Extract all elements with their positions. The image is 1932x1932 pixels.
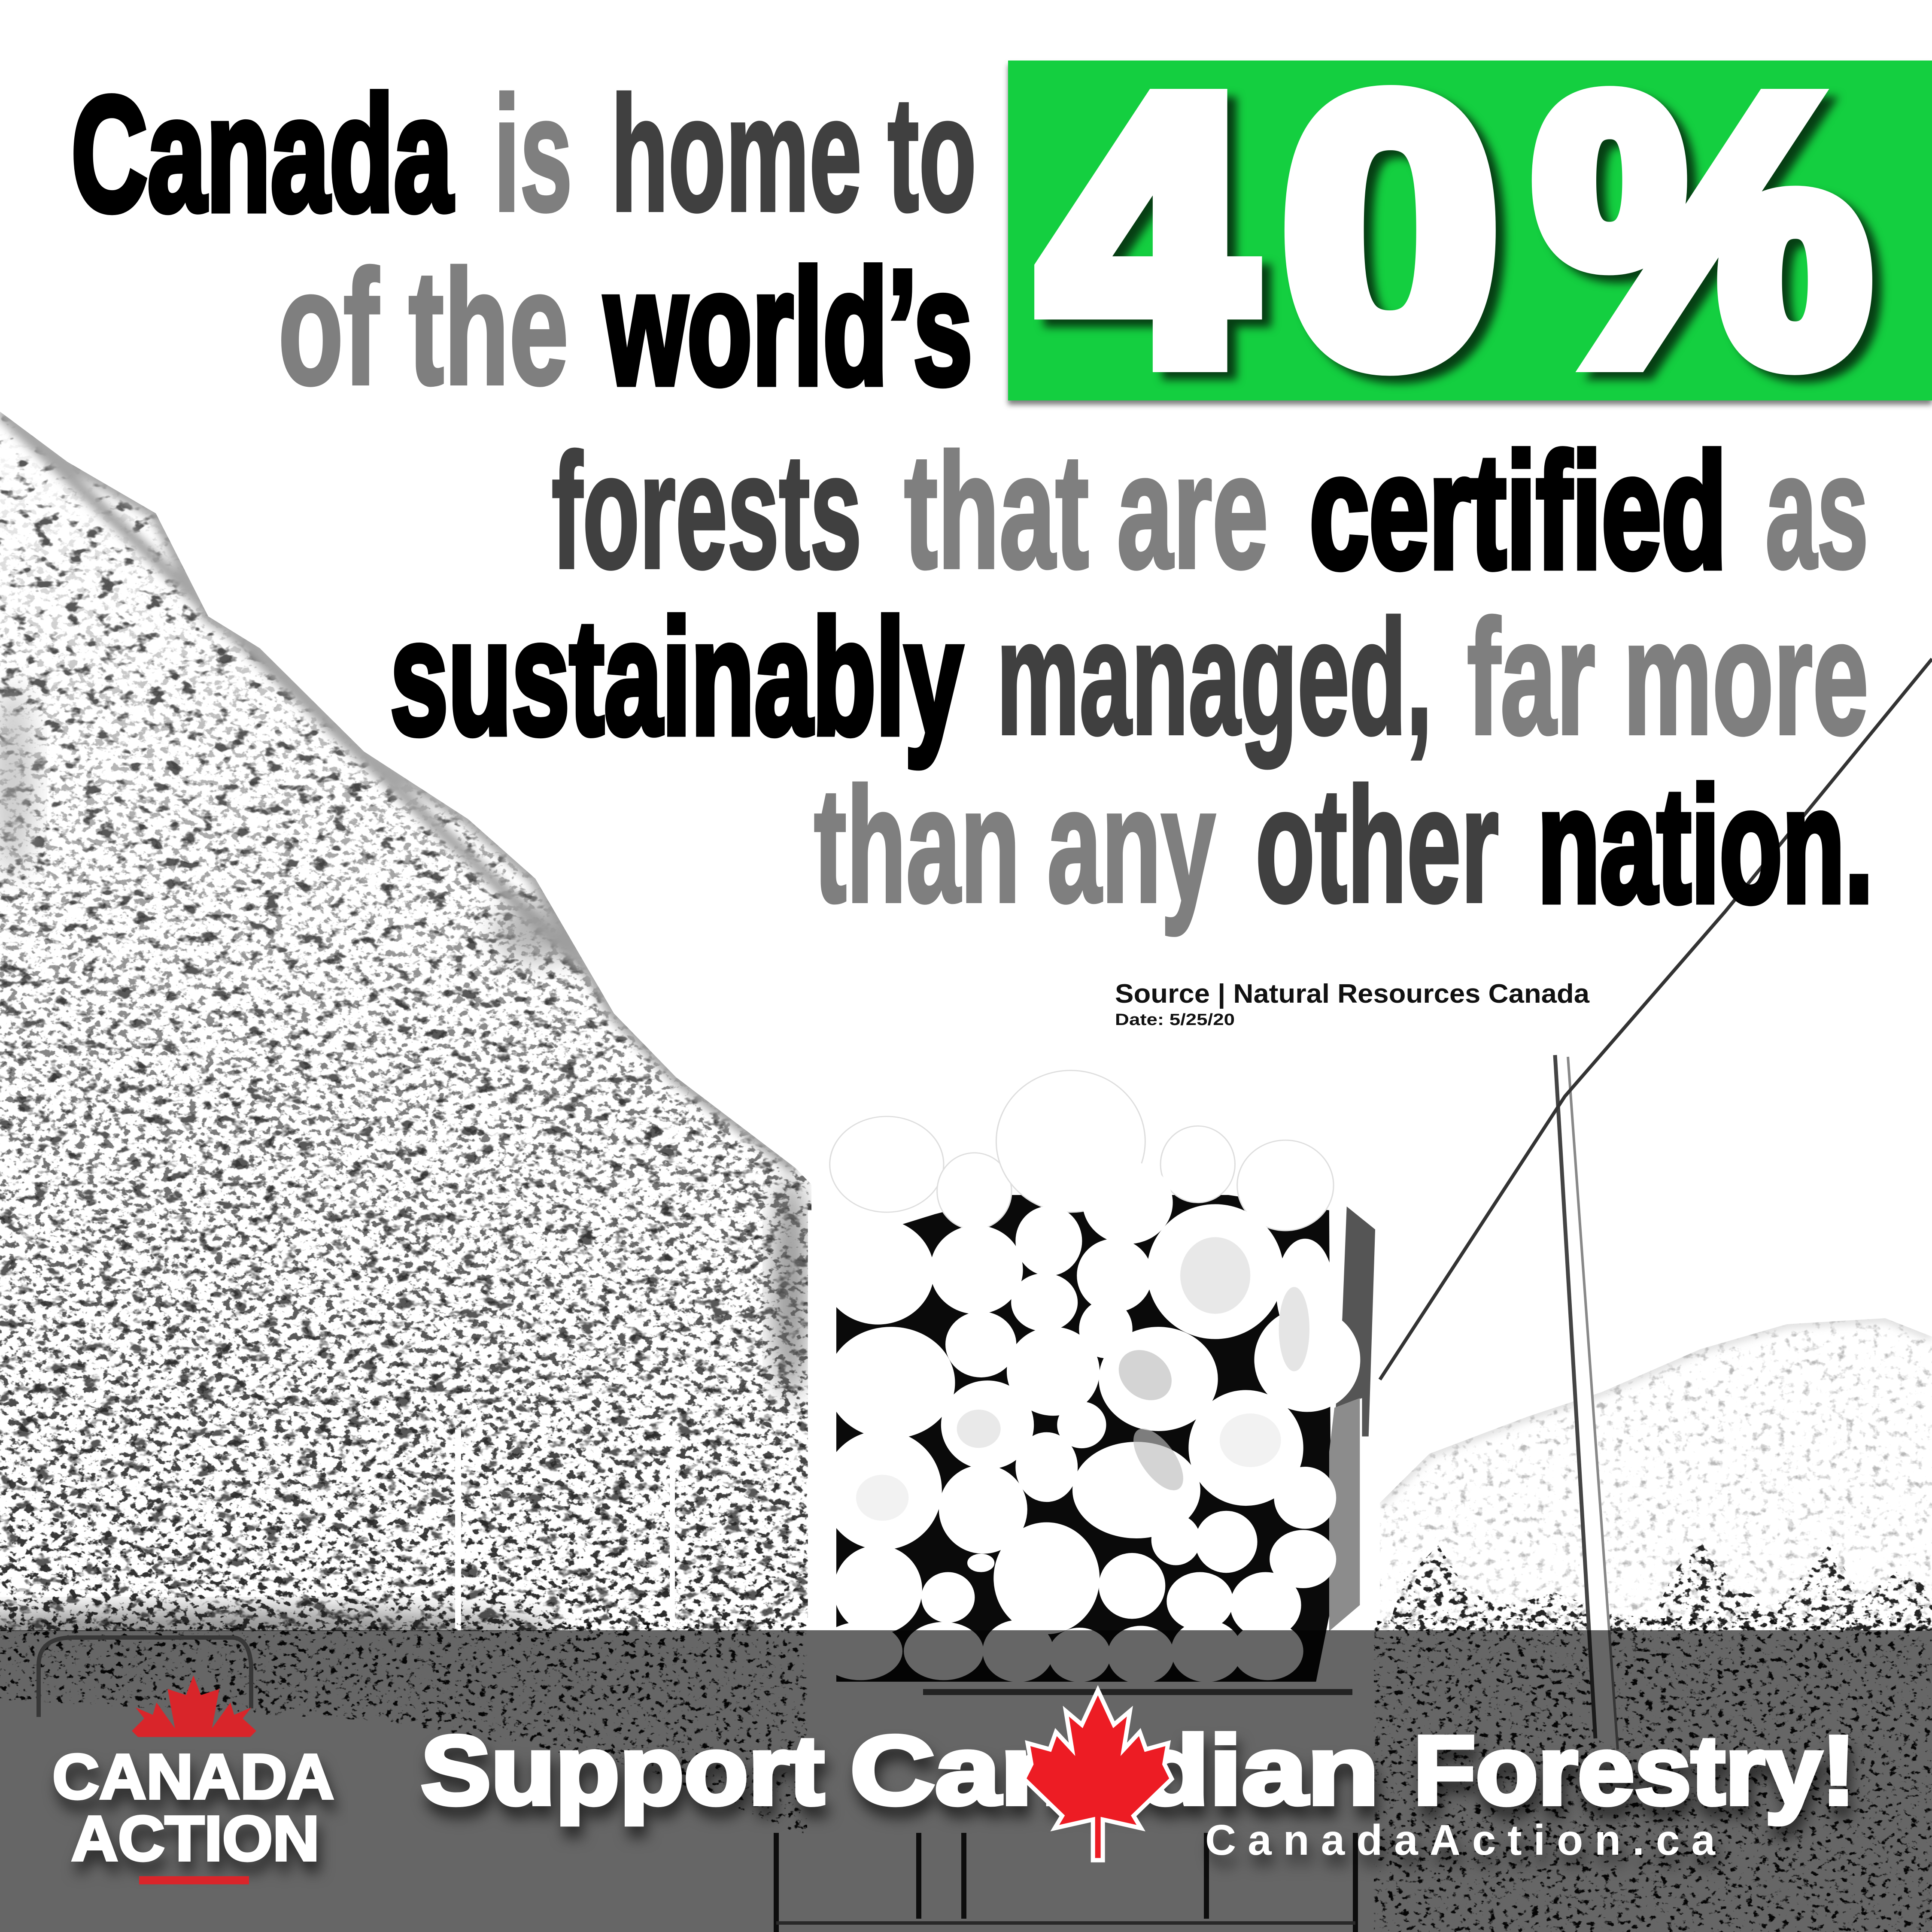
green box [1008, 61, 1932, 400]
source note: Source | Natural Resources Canada [1115, 979, 1590, 1009]
big number: 0 [1282, 20, 1499, 440]
power line [1380, 659, 1932, 1380]
logo: Canada Action [52, 1675, 334, 1884]
logo red bar [139, 1876, 249, 1884]
parked RV [39, 1638, 251, 1717]
source note [1115, 979, 1590, 1029]
log load on truck [808, 1071, 1375, 1686]
top-of-pile faint logs [830, 1071, 1334, 1231]
green 40% callout [1008, 20, 1932, 440]
right distant mountain [1380, 1318, 1932, 1631]
slogan [421, 1716, 1856, 1825]
logo maple crown [132, 1675, 256, 1737]
headline line 2: of the [278, 236, 568, 419]
left white truck stake [808, 1210, 834, 1686]
website: CanadaAction.ca [1205, 1816, 1716, 1864]
headline line 2 [278, 236, 972, 419]
big number: 4 [1041, 20, 1254, 440]
headline line 1: home to [611, 63, 976, 245]
headline line 4: managed, [996, 586, 1432, 769]
ground texture under the footer band, right [1374, 1618, 1932, 1932]
big number [1041, 20, 1870, 440]
logo wordmark: ACTION [71, 1803, 319, 1874]
headline line 2: world’s [603, 236, 972, 419]
individual logs [821, 1164, 1358, 1682]
headline line 4 [390, 586, 1868, 769]
slogan: Support [421, 1716, 824, 1825]
right truck stake [1329, 1207, 1375, 1631]
icon: red maple leaf [1024, 1690, 1172, 1860]
headline line 3: certified [1309, 420, 1727, 602]
truck rear frame [776, 1689, 1355, 1932]
source note: Date: 5/25/20 [1115, 1011, 1235, 1029]
slogan: Forestry! [1413, 1716, 1856, 1825]
big number: % [1535, 20, 1870, 440]
log end grain shading [856, 1237, 1309, 1521]
logo wordmark [52, 1741, 334, 1874]
headline line 5 [814, 754, 1873, 937]
headline line 3 [552, 420, 1868, 602]
right tree line [1380, 1528, 1932, 1631]
headline line 3: forests [552, 420, 862, 602]
utility pole [1555, 1055, 1618, 1750]
footer band [0, 1630, 1932, 1932]
ground texture under the footer band, left [0, 1623, 807, 1846]
headline line 1 [71, 63, 976, 245]
headline line 1: is [494, 63, 572, 245]
headline line 3: that are [904, 420, 1268, 602]
headline line 4: sustainably [390, 586, 963, 769]
left forested mountain [0, 386, 816, 1653]
headline line 5: than any [814, 754, 1216, 937]
headline line 5: other [1255, 754, 1499, 936]
headline line 1: Canada [71, 63, 453, 245]
slogan: Canadian [850, 1716, 1379, 1825]
black gaps between the logs [836, 1195, 1331, 1682]
logo wordmark: CANADA [52, 1741, 334, 1812]
